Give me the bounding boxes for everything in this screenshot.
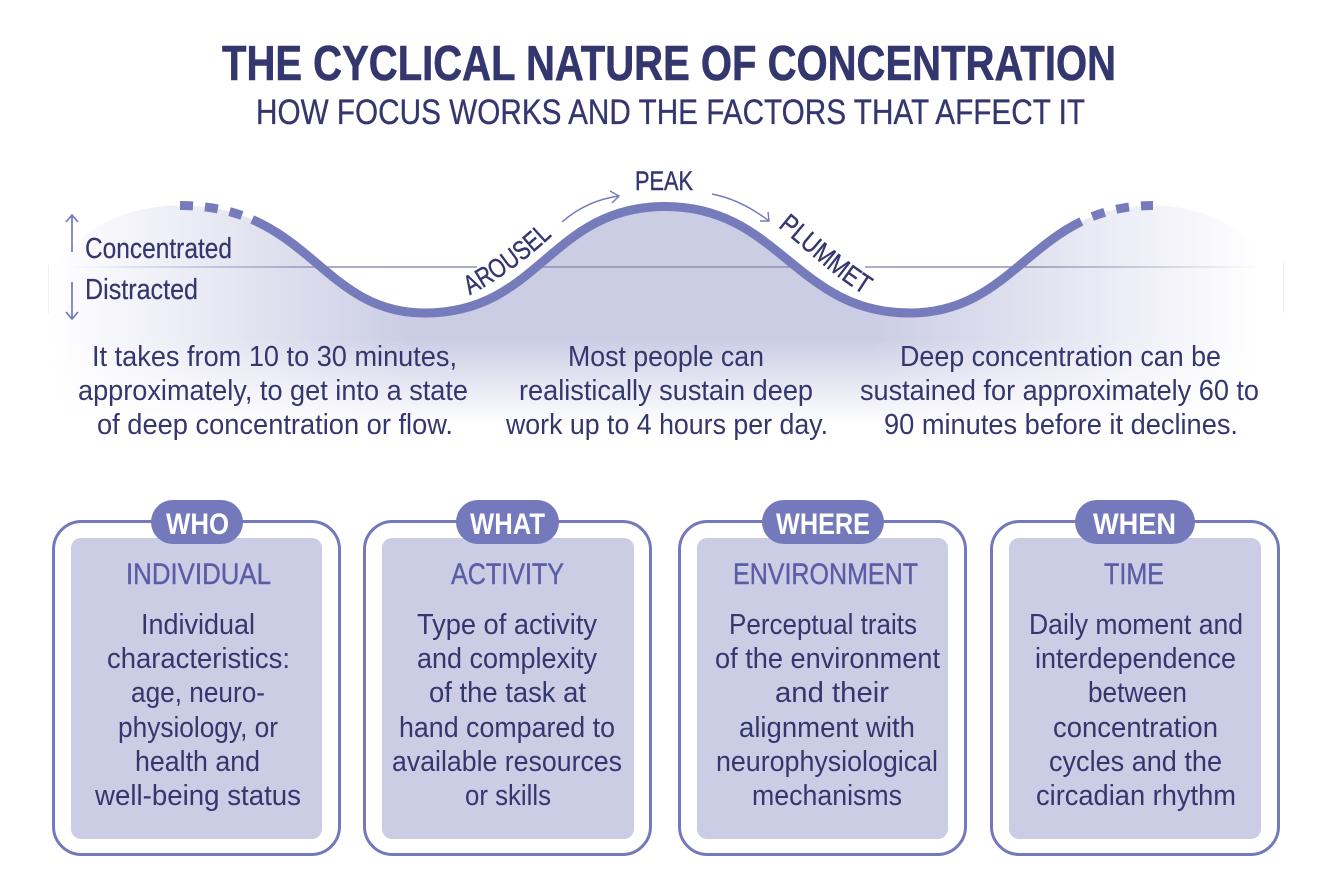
description: time: concentration xyxy=(1053,712,1218,744)
arrow: peak to plummet xyxy=(712,194,769,221)
description: environment: alignment with xyxy=(739,712,915,744)
heading: individual: INDIVIDUAL xyxy=(126,558,271,591)
pill: when: WHEN xyxy=(1093,508,1176,541)
pill: who xyxy=(151,500,243,544)
text block: time to reach flow xyxy=(78,341,468,441)
description: time: interdependence xyxy=(1035,643,1236,675)
text block: time to reach flow: approximately, to get into a state xyxy=(78,375,468,407)
panel: where xyxy=(680,500,966,854)
description: individual: physiology, or xyxy=(118,712,278,744)
heading: activity: ACTIVITY xyxy=(451,558,564,591)
text block: sustained concentration: Deep concentration can be xyxy=(900,341,1221,373)
description: activity: and complexity xyxy=(417,643,597,675)
arrow: up xyxy=(66,215,78,252)
heading: time: TIME xyxy=(1104,558,1164,591)
wave line, right half xyxy=(665,206,1153,313)
description: time: between xyxy=(1088,677,1187,709)
description: environment: Perceptual traits xyxy=(729,609,917,641)
description: individual: well-being status xyxy=(94,780,301,812)
description: environment xyxy=(715,609,940,812)
description: environment: and their xyxy=(775,677,889,709)
title: THE CYCLICAL NATURE OF CONCENTRATION xyxy=(222,37,1116,91)
description: time: circadian rhythm xyxy=(1036,780,1236,812)
description: activity: Type of activity xyxy=(417,609,597,641)
heading: environment: ENVIRONMENT xyxy=(733,558,918,591)
description: time: cycles and the xyxy=(1049,746,1222,778)
description: environment: of the environment xyxy=(715,643,940,675)
pill: where: WHERE xyxy=(776,508,870,541)
threshold line xyxy=(70,266,1262,268)
label: peak: PEAK xyxy=(635,166,693,196)
pill: who: WHO xyxy=(166,508,229,541)
pill: what xyxy=(456,500,559,544)
text block: sustained concentration xyxy=(860,341,1259,441)
chart: concentration cycle wave xyxy=(48,166,1284,412)
label: concentrated: Concentrated xyxy=(85,233,232,265)
pill: what: WHAT xyxy=(470,508,545,541)
label: arousel: AROUSEL xyxy=(466,227,552,296)
text block: time to reach flow: It takes from 10 to 30 minutes, xyxy=(92,341,457,373)
description: individual xyxy=(94,609,301,812)
description: environment: mechanisms xyxy=(752,780,902,812)
text block: daily deep work limit: work up to 4 hours per day. xyxy=(505,409,828,441)
arrow: down xyxy=(66,282,78,319)
description: environment: neurophysiological xyxy=(716,746,938,778)
description: activity: of the task at xyxy=(429,677,586,709)
subtitle: HOW FOCUS WORKS AND THE FACTORS THAT AFFECT IT xyxy=(256,93,1085,132)
label: plummet: PLUMMET xyxy=(779,214,874,292)
panel: what xyxy=(364,500,650,854)
text block: sustained concentration: 90 minutes before it declines. xyxy=(884,409,1238,441)
pill: where xyxy=(762,500,884,544)
text block: sustained concentration: sustained for approximately 60 to xyxy=(860,375,1259,407)
description: individual: health and xyxy=(135,746,260,778)
description: activity: or skills xyxy=(465,780,551,812)
wave line, left half xyxy=(180,206,665,313)
shaded area under the wave xyxy=(108,206,1200,412)
panel: who xyxy=(54,500,340,854)
description: individual: age, neuro- xyxy=(131,677,265,709)
text block: time to reach flow: of deep concentration or flow. xyxy=(97,409,453,441)
description: activity: hand compared to xyxy=(399,712,615,744)
description: time: Daily moment and xyxy=(1029,609,1243,641)
text block: daily deep work limit xyxy=(505,341,828,441)
description: activity: available resources xyxy=(392,746,622,778)
description: activity xyxy=(392,609,622,812)
text block: daily deep work limit: Most people can xyxy=(568,341,764,373)
label: distracted: Distracted xyxy=(85,274,198,306)
description: individual: Individual xyxy=(141,609,255,641)
description: time xyxy=(1029,609,1243,812)
pill: when xyxy=(1075,500,1195,544)
text block: daily deep work limit: realistically sustain deep xyxy=(519,375,813,407)
panel: when xyxy=(992,500,1278,854)
arrow: arousel to peak xyxy=(562,191,619,222)
description: individual: characteristics: xyxy=(107,643,290,675)
